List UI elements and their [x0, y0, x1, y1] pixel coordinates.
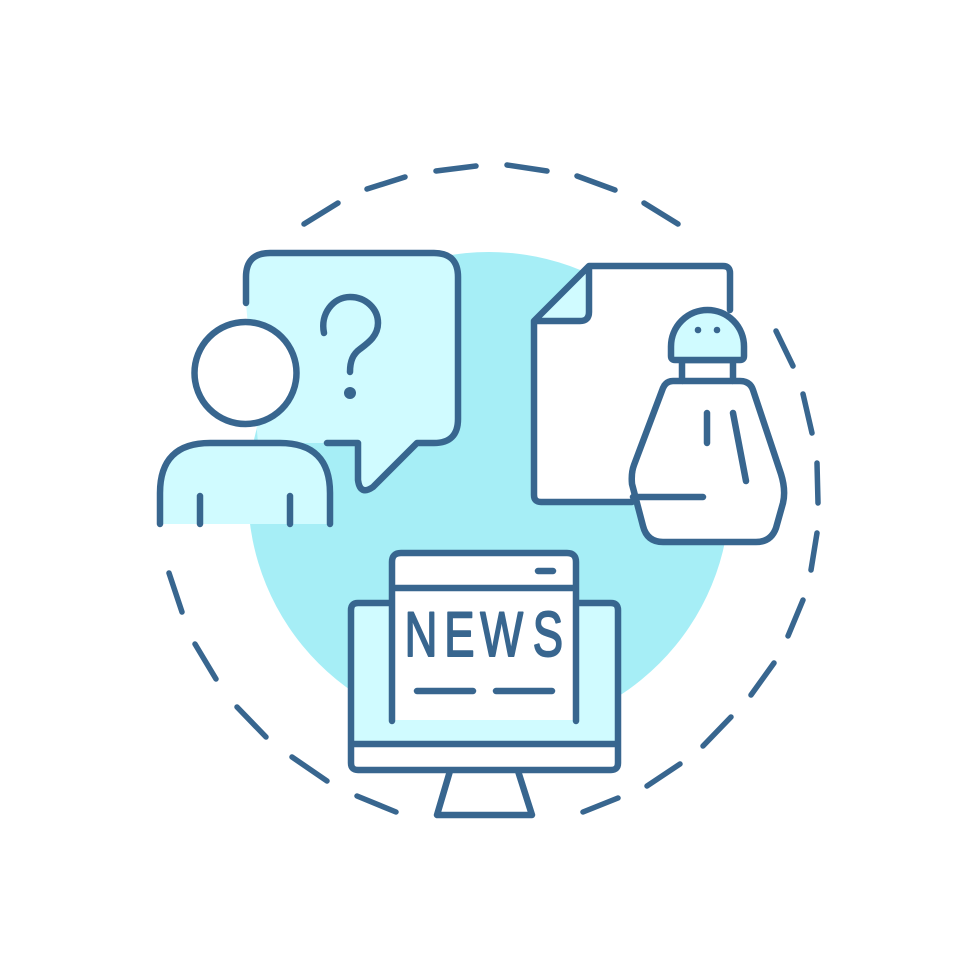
headline: NEWS [405, 599, 563, 670]
icon: person [160, 322, 330, 524]
shaker cap [671, 310, 744, 360]
person head [194, 322, 296, 424]
icon: document [534, 266, 730, 502]
background circle [248, 252, 730, 734]
monitor stand [437, 771, 532, 815]
shaker body [632, 360, 784, 542]
icon: speech bubble with question mark [246, 253, 458, 490]
dashed ring [169, 165, 818, 812]
person body [160, 443, 330, 524]
monitor screen [351, 603, 618, 770]
icon: question mark [323, 297, 378, 399]
text lines [417, 688, 552, 694]
icon: computer monitor with news [351, 553, 618, 815]
news page [392, 553, 576, 720]
icon: salt shaker [632, 310, 784, 542]
